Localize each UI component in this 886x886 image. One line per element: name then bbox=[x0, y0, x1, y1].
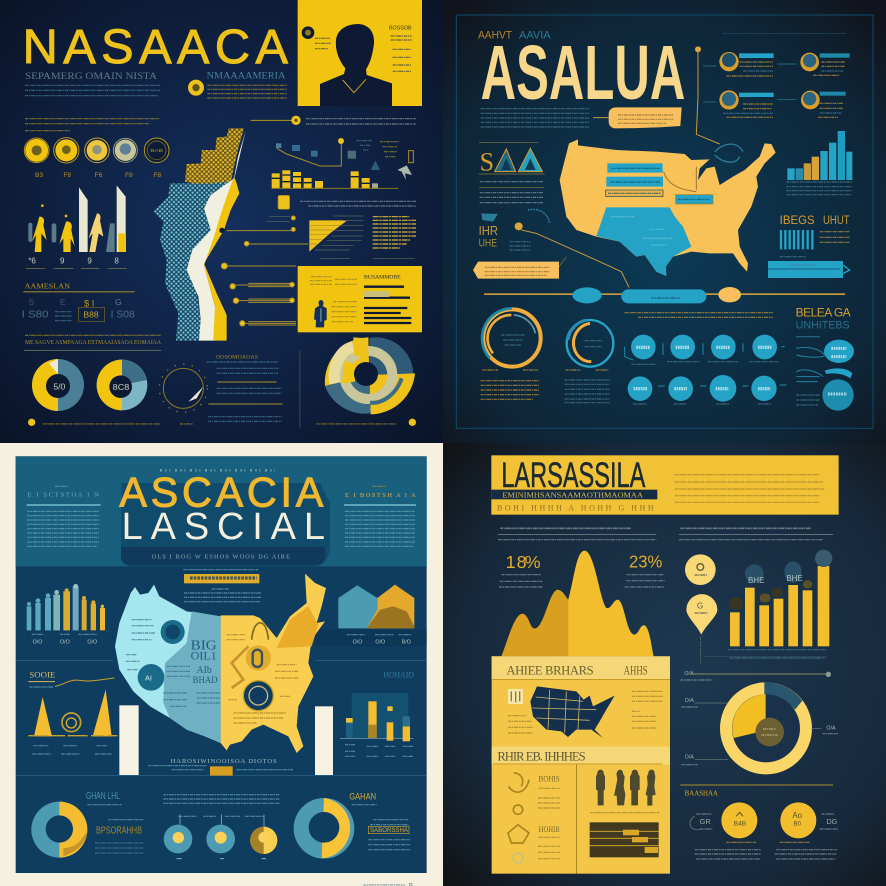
section divider heading: RHIR EB. IHHHES bbox=[497, 750, 586, 764]
left subtitle: SEPAMERG OMAIN NISTA bbox=[25, 71, 157, 82]
frame bbox=[456, 15, 873, 428]
kicker bbox=[478, 29, 551, 41]
stats columns: E bbox=[60, 298, 65, 307]
circle icons row: BAB bbox=[150, 148, 163, 153]
right intro text lines bbox=[207, 85, 287, 98]
right hex chart: O/O bbox=[353, 640, 362, 646]
footer dots and lines bbox=[28, 419, 416, 426]
people labels: 9 bbox=[87, 256, 92, 265]
people labels: 8 bbox=[114, 256, 119, 265]
icon: person figure bbox=[314, 300, 327, 327]
header paragraph bbox=[675, 475, 825, 502]
stats columns bbox=[22, 297, 135, 321]
lower circles: B4B bbox=[734, 821, 747, 828]
icon list: HOHIB bbox=[539, 825, 560, 834]
text row bbox=[300, 201, 416, 206]
people labels: *6 bbox=[28, 256, 36, 265]
donut labels: O/A bbox=[685, 755, 694, 761]
center text lines bbox=[163, 795, 279, 816]
intro text bbox=[481, 109, 589, 127]
portrait panel bbox=[298, 0, 422, 106]
left intro text lines bbox=[25, 85, 160, 96]
main panel background bbox=[16, 456, 427, 873]
donut bottom right bbox=[294, 798, 354, 859]
right header column bbox=[344, 486, 416, 546]
donut labels: O/A bbox=[826, 726, 836, 732]
text bottom right bbox=[349, 792, 410, 850]
small bar chart bbox=[272, 170, 398, 189]
US map: AIb bbox=[197, 665, 212, 676]
left peak chart bbox=[28, 690, 117, 754]
info panel with person bbox=[298, 266, 422, 332]
title shadow bbox=[121, 483, 330, 566]
text bottom left: BPSORAHHB bbox=[96, 826, 142, 837]
circle row labels: F6 bbox=[95, 172, 103, 179]
central figure: dotted silhouette bbox=[153, 128, 246, 341]
portrait panel: BOSSOB bbox=[389, 25, 412, 31]
stat labels right bbox=[780, 213, 850, 249]
small SAA heading bbox=[480, 148, 542, 177]
donut bottom left bbox=[31, 802, 87, 858]
bar chart bbox=[705, 550, 832, 658]
yellow report panel bbox=[492, 656, 670, 874]
stats heading: AAMESLAN bbox=[25, 282, 70, 291]
people chart left: O/O bbox=[87, 640, 97, 646]
people icons bbox=[590, 770, 659, 813]
stats columns: G bbox=[115, 297, 122, 307]
info panel with person: BUSAMMOBE bbox=[364, 275, 401, 281]
right hex chart bbox=[338, 585, 414, 646]
stats heading bbox=[23, 282, 135, 292]
header small labels: BOHI HHHH A HOHH G HHH bbox=[497, 504, 654, 513]
donut labels: O/A bbox=[685, 698, 694, 704]
donut chart 1: 5/0 bbox=[53, 382, 66, 391]
icon: person silhouette bbox=[320, 24, 392, 106]
vertical divider bbox=[576, 765, 577, 874]
header title: LARSASSILA bbox=[501, 456, 646, 495]
ring labels and text bbox=[481, 370, 610, 403]
subtitle band bbox=[121, 547, 325, 566]
white bars bbox=[119, 705, 333, 775]
right bottom heading: UNHITEBS bbox=[796, 319, 850, 331]
right subtitle: NMAAAAMERIA bbox=[207, 71, 285, 82]
header panel: EMINIMHSANSAAMAOTHMAOMAA bbox=[502, 490, 644, 499]
text bottom right: GAHAN bbox=[349, 792, 376, 802]
large ring chart bbox=[325, 337, 415, 414]
US map: BHAD bbox=[193, 676, 218, 686]
yellow report panel: AHHS bbox=[624, 664, 648, 678]
left small labels bbox=[479, 209, 550, 250]
lower circles bbox=[690, 802, 838, 859]
donut chart 1 bbox=[32, 359, 84, 411]
stat 23%: 23% bbox=[629, 551, 662, 571]
text bottom left: GHAN LHL bbox=[86, 791, 120, 802]
stats columns: S bbox=[28, 297, 34, 307]
map pin bbox=[686, 594, 717, 665]
donut chart 2: 8C8 bbox=[113, 382, 130, 392]
people chart left: O/O bbox=[33, 640, 42, 646]
icon list: BOHIS bbox=[539, 774, 560, 783]
left trend bbox=[28, 669, 114, 687]
lower heading: BAASHAA bbox=[685, 789, 719, 798]
map caption bbox=[148, 758, 293, 776]
stats columns: $ I bbox=[84, 299, 94, 309]
circle row labels: F8 bbox=[125, 172, 133, 179]
US map: BIG bbox=[191, 638, 217, 653]
right bar chart: HOHAID bbox=[383, 669, 414, 679]
yellow text block bbox=[373, 217, 416, 248]
callout circle bbox=[685, 554, 716, 585]
circle row labels bbox=[35, 172, 161, 179]
bar chart: BHE bbox=[748, 576, 764, 585]
small circles chart bbox=[164, 815, 277, 859]
people with tall bars bbox=[28, 185, 126, 252]
right hex chart: B/O bbox=[402, 640, 411, 646]
centre text lines bbox=[625, 313, 773, 317]
left trend: SOOIE bbox=[29, 669, 55, 679]
small SAA heading: S bbox=[480, 148, 494, 177]
circle row labels: F8 bbox=[63, 172, 71, 179]
long text rows bbox=[24, 335, 161, 350]
timeline: O/A bbox=[684, 671, 694, 677]
US map bbox=[560, 139, 776, 276]
people chart left: O/O bbox=[60, 640, 70, 646]
panel heading: AHIEE BRHARS bbox=[506, 664, 594, 678]
ribbon left bbox=[473, 257, 566, 279]
donut chart bbox=[720, 682, 812, 774]
map caption: HAROSIWINOOISOA DIOTOS bbox=[171, 758, 277, 765]
timeline bbox=[484, 287, 845, 303]
right header column: E I BOSTSH A I A bbox=[345, 492, 416, 499]
title line 2: LASCIAL bbox=[122, 506, 325, 548]
kicker: AAHVT bbox=[478, 29, 512, 41]
left notes bbox=[508, 689, 533, 733]
stat 18% bbox=[499, 552, 543, 587]
lower rule bbox=[680, 783, 833, 786]
section text left bbox=[25, 119, 159, 131]
text bottom right: SABORSSHA bbox=[370, 828, 408, 834]
people labels: 9 bbox=[60, 256, 65, 265]
donut labels bbox=[681, 698, 838, 765]
lower circles: Ao bbox=[792, 811, 803, 820]
right bottom heading bbox=[796, 306, 851, 331]
people labels bbox=[26, 256, 127, 269]
kicker: AAVIA bbox=[519, 29, 551, 41]
left header column bbox=[27, 486, 101, 546]
stat labels right: UHUT bbox=[823, 213, 850, 227]
long text rows: ME SAGVE ASMPAAGA ESTMAAIASAOA EOMAIAA bbox=[25, 339, 161, 346]
section text right with marker bbox=[251, 116, 416, 125]
header subtitle band bbox=[491, 490, 657, 499]
small icon box bbox=[278, 195, 290, 209]
panel: ASCACIA LASCIAL infographic (bottom left) bbox=[0, 443, 443, 886]
text bottom left bbox=[86, 791, 143, 853]
panel: ASALUA infographic (top right) bbox=[443, 0, 886, 443]
right bottom bubbles bbox=[796, 337, 854, 411]
panel: LARSASSILA infographic (bottom right) bbox=[443, 443, 886, 886]
circular diagram bbox=[159, 364, 207, 412]
left header column: E I SCTSTOA I N bbox=[27, 491, 99, 498]
dark table bbox=[590, 822, 659, 857]
lower center text bbox=[207, 355, 283, 421]
people chart left bbox=[27, 584, 105, 646]
title line 1: ASCACIA bbox=[119, 469, 324, 515]
stats columns: B88 bbox=[83, 310, 99, 319]
bar chart top right bbox=[786, 131, 852, 195]
leader line from title to map bbox=[695, 46, 743, 162]
footer note bbox=[363, 883, 412, 886]
map pin: G bbox=[697, 602, 703, 611]
right bottom heading: BELEA GA bbox=[796, 306, 851, 320]
mountain area chart bbox=[501, 551, 654, 656]
circles row 1 bbox=[625, 335, 785, 364]
leader line lower bbox=[515, 222, 629, 287]
icon list bbox=[508, 773, 560, 863]
vertical divider bbox=[298, 351, 301, 427]
lower circles: DG bbox=[826, 817, 838, 826]
circle row labels: F8 bbox=[153, 172, 161, 179]
top right icon bullets bbox=[703, 52, 850, 117]
header panel bbox=[491, 455, 839, 515]
stat labels right: IBEGS bbox=[780, 213, 815, 227]
ring chart 2 bbox=[567, 320, 613, 367]
right bar chart bbox=[340, 669, 414, 756]
lower circles: GR bbox=[700, 817, 711, 826]
title: ASALUA bbox=[481, 30, 685, 116]
donut chart 2 bbox=[97, 360, 147, 410]
stats columns: I S80 bbox=[22, 309, 49, 320]
icon: round badge bbox=[188, 80, 204, 96]
bar chart: BHE bbox=[786, 574, 803, 583]
right hex band shadow bbox=[315, 630, 427, 646]
US map bbox=[115, 574, 326, 753]
right hex chart: O/O bbox=[375, 640, 385, 646]
left small labels: UHE bbox=[479, 238, 497, 250]
stat 18%: 1 8% bbox=[506, 552, 541, 572]
network chart bbox=[276, 138, 413, 180]
right notes bbox=[632, 691, 663, 728]
ribbon right bbox=[768, 257, 850, 278]
stats columns: I S08 bbox=[111, 309, 135, 320]
lower center text: OOSOMOAOAS bbox=[216, 355, 258, 361]
US map: OIL1 bbox=[191, 651, 217, 663]
subtitle: OLS I BOG W ESHOS WOOS DG AIRE bbox=[152, 554, 290, 561]
stat 23% bbox=[625, 551, 665, 587]
header band bbox=[16, 456, 427, 566]
left small labels: IHR bbox=[479, 224, 498, 238]
circles row 2 bbox=[628, 375, 786, 404]
section divider heading bbox=[492, 747, 670, 765]
left text blocks bbox=[479, 143, 545, 203]
circle row labels: B3 bbox=[35, 172, 43, 179]
kicker bbox=[160, 466, 275, 474]
title: NASAACA bbox=[23, 20, 289, 74]
lower circles: B0 bbox=[794, 822, 802, 828]
map heading bbox=[183, 570, 262, 602]
US map: AI bbox=[145, 673, 152, 682]
connector lines from figure bbox=[221, 216, 308, 326]
triangle chart bbox=[267, 216, 415, 259]
callout label bbox=[593, 107, 682, 128]
section heads bbox=[498, 528, 833, 540]
panel: NASA ACA infographic (top left) bbox=[0, 0, 443, 443]
ring chart 1 bbox=[482, 308, 541, 367]
timeline bbox=[680, 671, 831, 680]
lines across panel bbox=[16, 660, 427, 775]
circle icons row bbox=[24, 138, 169, 163]
small US map bbox=[530, 686, 615, 738]
